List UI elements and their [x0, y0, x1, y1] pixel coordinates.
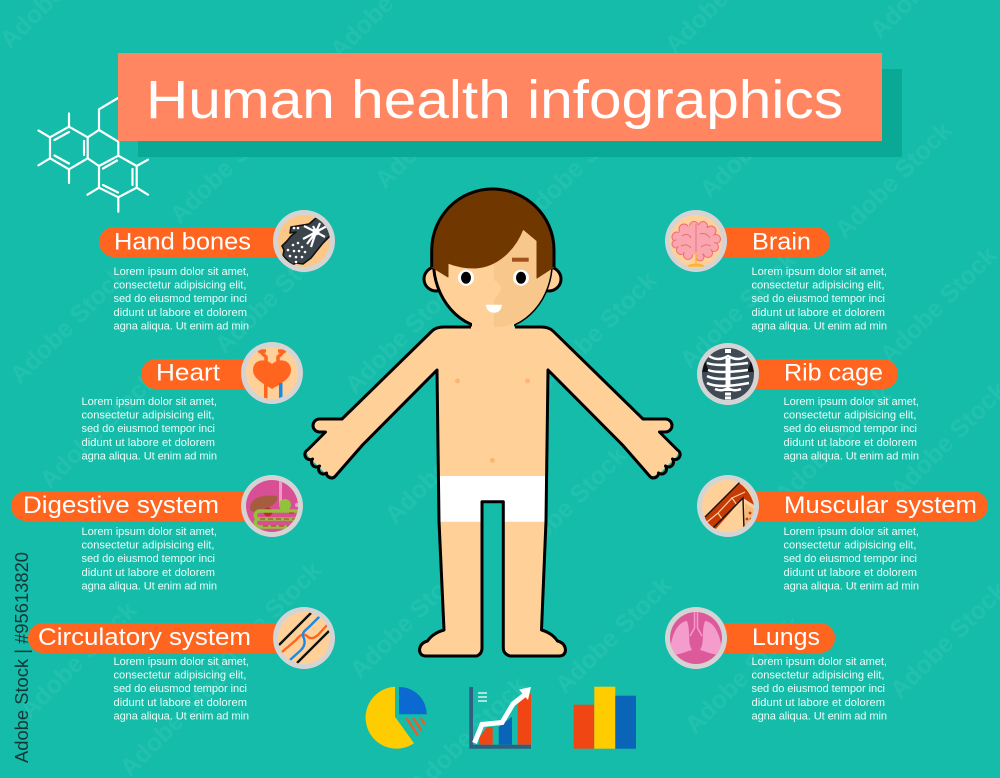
panel: circulatory system: didunt ut labore et dolorem [114, 697, 247, 709]
icon: heart [241, 342, 303, 404]
briefs [438, 476, 547, 522]
icon: circulatory system [273, 607, 335, 669]
panel: rib cage: consectetur adipisicing elit, [784, 410, 916, 422]
watermark pattern: Adobe Stock [164, 101, 292, 229]
watermark pattern: Adobe Stock [514, 101, 642, 229]
title banner shadow [138, 69, 902, 157]
panel: rib cage: agna aliqua. Ut enim ad min [784, 450, 919, 462]
panel: heart: sed do eiusmod tempor inci [82, 423, 215, 435]
eyebrow [512, 258, 529, 262]
watermark pattern: Adobe Stock [4, 261, 132, 389]
panel: digestive system: consectetur adipisicing elit, [82, 540, 214, 552]
panel: muscular system: Muscular system [784, 492, 977, 519]
panel: muscular system: didunt ut labore et dolorem [784, 567, 917, 579]
panel: lungs: sed do eiusmod tempor inci [752, 683, 885, 695]
panel: brain: sed do eiusmod tempor inci [752, 293, 885, 305]
panel: hand bones: agna aliqua. Ut enim ad min [114, 320, 249, 332]
watermark pattern: Adobe Stock [679, 611, 807, 739]
pie chart [366, 687, 431, 749]
mouth [486, 305, 502, 313]
watermark pattern: Adobe Stock [829, 116, 957, 244]
molecule icon [38, 98, 148, 212]
panel: brain: consectetur adipisicing elit, [752, 280, 884, 292]
panel: lungs: agna aliqua. Ut enim ad min [752, 710, 887, 722]
panel: hand bones: Lorem ipsum dolor sit amet, [114, 266, 249, 278]
panel: brain: Brain [752, 228, 811, 256]
watermark pattern: Adobe Stock [874, 241, 1000, 369]
panel: muscular system: Lorem ipsum dolor sit amet, [784, 526, 919, 538]
panel: heart: didunt ut labore et dolorem [82, 437, 215, 449]
neck [472, 318, 514, 329]
panel: muscular system [697, 475, 988, 592]
watermark pattern: Adobe Stock [34, 366, 162, 494]
ear left [424, 267, 448, 291]
body outline [305, 327, 680, 656]
panel: lungs: Lungs [752, 624, 820, 651]
panel: muscular system: sed do eiusmod tempor inci [784, 553, 917, 565]
panel: lungs: didunt ut labore et dolorem [752, 697, 885, 709]
eye left [458, 270, 474, 286]
watermark pattern: Adobe Stock [199, 556, 327, 684]
watermark pattern: Adobe Stock [504, 441, 632, 569]
panel: rib cage: Rib cage [784, 360, 883, 386]
icon: muscular system [697, 475, 759, 537]
panel: rib cage [697, 343, 919, 462]
icon: rib cage [697, 343, 759, 405]
title banner [118, 53, 882, 141]
watermark pattern: Adobe Stock [209, 231, 337, 359]
panel: hand bones: sed do eiusmod tempor inci [114, 293, 247, 305]
panel: circulatory system: Circulatory system [38, 624, 251, 651]
panel: digestive system [11, 475, 303, 592]
panel: heart: Heart [156, 360, 220, 386]
watermark pattern: Adobe Stock [534, 266, 662, 394]
watermark pattern: Adobe Stock [344, 556, 472, 684]
watermark pattern: Adobe Stock [14, 596, 142, 724]
panel: hand bones: didunt ut labore et dolorem [114, 307, 247, 319]
panel: circulatory system: sed do eiusmod tempor inci [114, 683, 247, 695]
panel: heart: Lorem ipsum dolor sit amet, [82, 396, 217, 408]
panel: digestive system: Digestive system [23, 492, 219, 519]
panel: brain: agna aliqua. Ut enim ad min [752, 320, 887, 332]
bar chart [574, 687, 636, 749]
body fill [306, 327, 679, 656]
face [434, 195, 552, 329]
panel: lungs [665, 607, 887, 722]
panel: brain: didunt ut labore et dolorem [752, 307, 885, 319]
watermark pattern: Adobe Stock [549, 571, 677, 699]
watermark pattern: Adobe Stock [339, 271, 467, 399]
stock id label: Adobe Stock | #95613820 [12, 552, 32, 763]
panel: muscular system: agna aliqua. Ut enim ad min [784, 580, 919, 592]
title: Human health infographics [146, 70, 843, 130]
panel: hand bones: consectetur adipisicing elit, [114, 280, 246, 292]
watermark pattern: Adobe Stock [369, 66, 497, 194]
watermark pattern: Adobe Stock [694, 76, 822, 204]
hair [432, 189, 554, 278]
panel: lungs: consectetur adipisicing elit, [752, 670, 884, 682]
panel: muscular system: consectetur adipisicing elit, [784, 540, 916, 552]
panel: circulatory system: agna aliqua. Ut enim ad min [114, 710, 249, 722]
panel: rib cage: didunt ut labore et dolorem [784, 437, 917, 449]
panel: circulatory system: Lorem ipsum dolor sit amet, [114, 656, 249, 668]
line chart [469, 687, 531, 749]
panel: digestive system: agna aliqua. Ut enim ad min [82, 580, 217, 592]
eye right [513, 270, 529, 286]
panel: digestive system: Lorem ipsum dolor sit amet, [82, 526, 217, 538]
panel: heart [82, 342, 303, 462]
face shading [494, 230, 552, 324]
panel: circulatory system [28, 607, 335, 722]
panel: heart: consectetur adipisicing elit, [82, 410, 214, 422]
panel: hand bones: Hand bones [114, 228, 251, 256]
watermark pattern: Adobe Stock [379, 401, 507, 529]
panel: lungs: Lorem ipsum dolor sit amet, [752, 656, 887, 668]
human figure [305, 189, 680, 656]
ear right [537, 267, 561, 291]
watermark pattern: Adobe Stock [769, 381, 897, 509]
nipples and navel [455, 378, 530, 463]
neck shading [494, 318, 514, 327]
panel: brain [665, 210, 887, 332]
icon: brain [665, 210, 727, 272]
panel: rib cage: Lorem ipsum dolor sit amet, [784, 396, 919, 408]
panel: brain: Lorem ipsum dolor sit amet, [752, 266, 887, 278]
panel: digestive system: didunt ut labore et dolorem [82, 567, 215, 579]
panel: digestive system: sed do eiusmod tempor inci [82, 553, 215, 565]
panel: circulatory system: consectetur adipisicing elit, [114, 670, 246, 682]
hair outline [432, 189, 554, 267]
panel: hand bones [99, 210, 335, 332]
panel: rib cage: sed do eiusmod tempor inci [784, 423, 917, 435]
watermark pattern: Adobe Stock [674, 246, 802, 374]
panel: heart: agna aliqua. Ut enim ad min [82, 450, 217, 462]
icon: digestive system [241, 475, 303, 537]
icon: hand bones [273, 210, 335, 272]
icon: lungs [665, 607, 727, 669]
